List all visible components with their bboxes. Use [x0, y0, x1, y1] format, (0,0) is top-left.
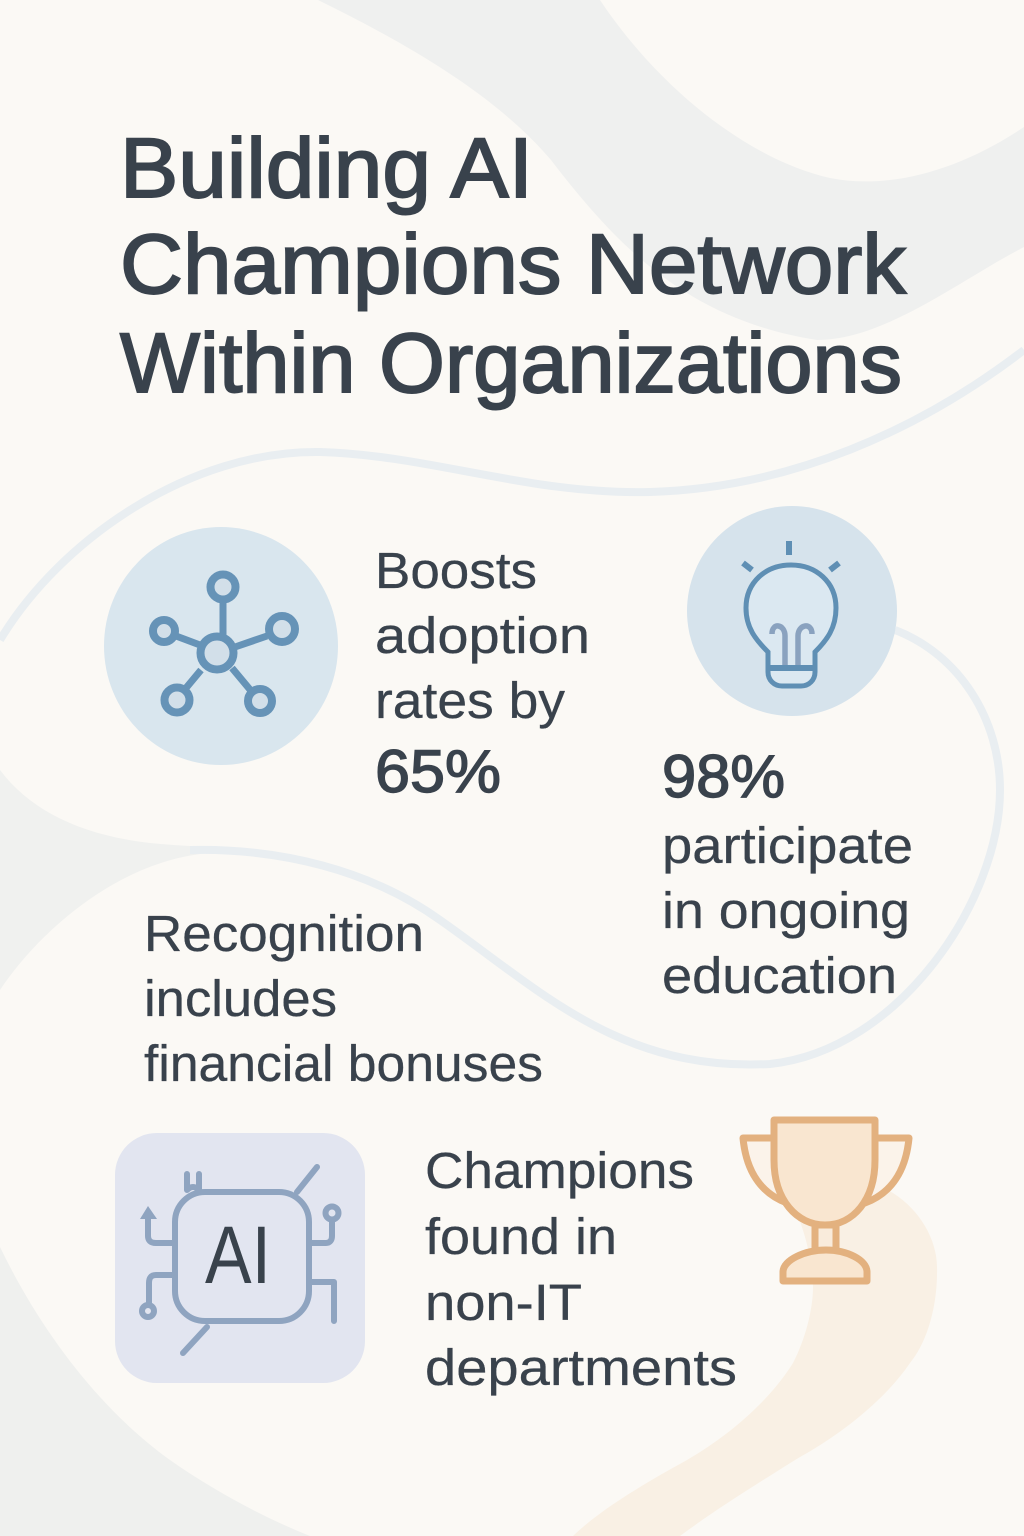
text: non-IT departments: Champions: [425, 1142, 694, 1199]
text: recognition: includes: [144, 970, 337, 1027]
text: non-IT departments: [425, 1142, 737, 1396]
text: ongoing education: education: [662, 947, 897, 1004]
text: recognition: Recognition: [144, 905, 424, 962]
text: recognition: [144, 905, 543, 1092]
text: non-IT departments: departments: [425, 1339, 737, 1396]
icon: AI chip: AI: [205, 1210, 271, 1301]
text: ongoing education: 98%: [662, 743, 785, 810]
text: ongoing education: in ongoing: [662, 882, 910, 939]
text: adoption rates: 65%: [375, 738, 501, 805]
title: [120, 121, 907, 410]
text: adoption rates: adoption: [375, 607, 590, 664]
icon: light bulb: [687, 506, 897, 716]
text: non-IT departments: non-IT: [425, 1274, 582, 1331]
icon: trophy: [743, 1120, 909, 1281]
title: Building AI: [120, 121, 533, 215]
icon: AI chip: [115, 1133, 365, 1383]
text: adoption rates: rates by: [375, 672, 566, 729]
title: Champions Network: [120, 217, 907, 311]
text: ongoing education: participate: [662, 817, 913, 874]
text: ongoing education: [662, 743, 913, 1004]
title: Within Organizations: [120, 316, 902, 410]
text: recognition: financial bonuses: [144, 1035, 543, 1092]
text: adoption rates: [375, 542, 590, 805]
text: non-IT departments: found in: [425, 1208, 617, 1265]
text: adoption rates: Boosts: [375, 542, 537, 599]
icon: network: [104, 527, 338, 765]
